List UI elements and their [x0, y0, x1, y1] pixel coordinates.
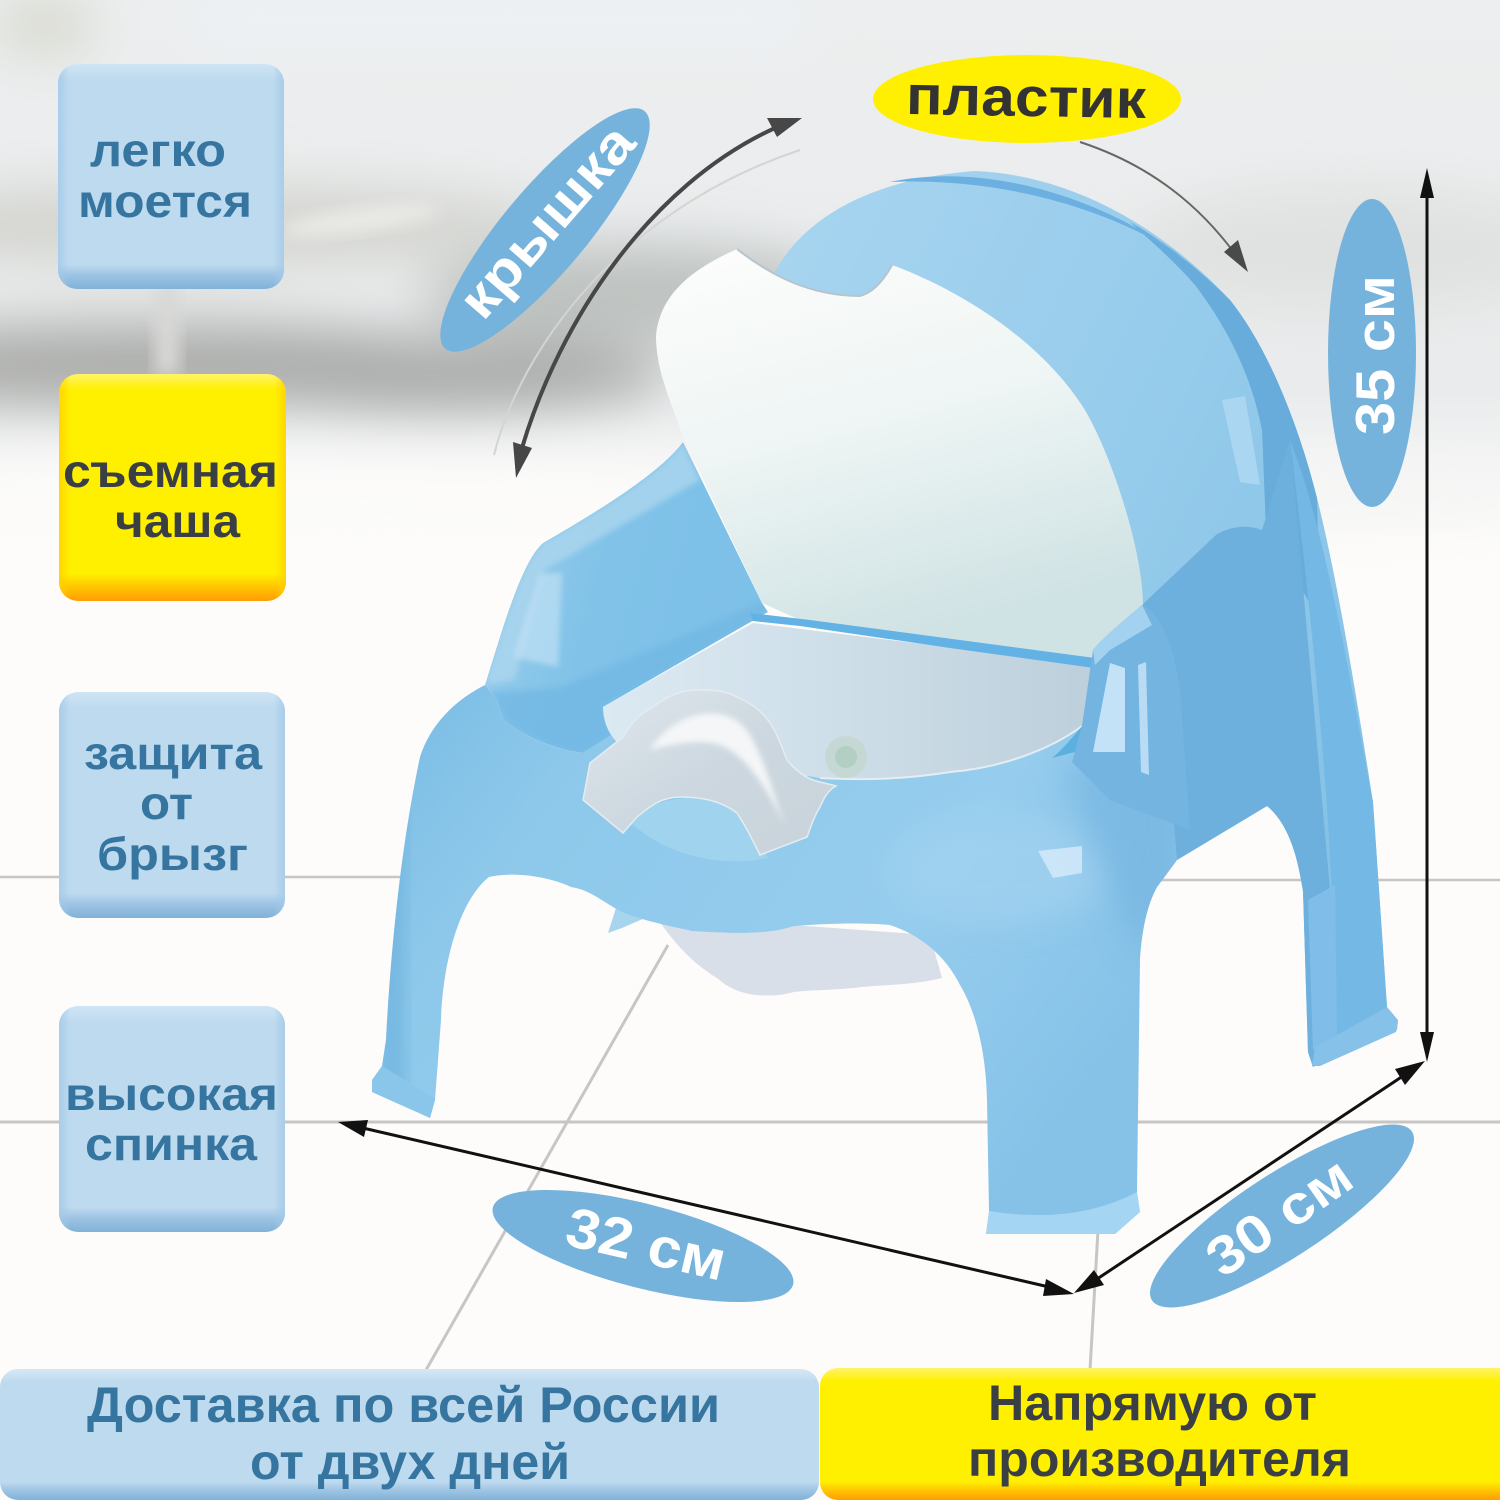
- banner: delivery: [0, 1369, 819, 1500]
- banner: delivery: Доставка по всей России: [87, 1377, 720, 1433]
- badge: [825, 736, 867, 778]
- bowl interior: [603, 623, 1095, 779]
- label: plastic: пластик: [906, 64, 1147, 130]
- guard sheen: [650, 713, 785, 825]
- dimension: height: [1328, 168, 1434, 1062]
- feature card: removable bowl: чаша: [115, 495, 240, 547]
- feature card: high back: спинка: [85, 1118, 257, 1170]
- lid: [656, 249, 1143, 665]
- dimension: width: [338, 1120, 1074, 1325]
- potty chair: [372, 171, 1398, 1234]
- feature card: easy to wash: [58, 64, 284, 289]
- splash guard: [583, 690, 836, 855]
- label: lid: крышка: [447, 112, 648, 330]
- feature card: easy to wash: моется: [78, 175, 252, 227]
- floor tile lines: [0, 877, 1500, 1370]
- background light streak: [279, 197, 441, 243]
- label: lid: [413, 84, 677, 376]
- feature card: splash guard: [59, 692, 285, 918]
- label: plastic: [873, 55, 1181, 143]
- splash guard hole: [630, 798, 768, 861]
- back top edge: [890, 176, 1180, 255]
- arrow: lid swing: [494, 118, 802, 478]
- feature card: easy to wash: легко: [90, 124, 226, 176]
- pot under seat: [655, 915, 942, 996]
- feature card: high back: [59, 1006, 285, 1232]
- feature card: high back: высокая: [65, 1068, 278, 1120]
- feature card: removable bowl: съемная: [63, 445, 278, 497]
- back dark edge: [1130, 222, 1320, 620]
- banner: manufacturer: производителя: [968, 1431, 1351, 1487]
- arrow: plastic: [1080, 142, 1248, 272]
- left armrest: [485, 442, 768, 753]
- seat sheen: [372, 760, 1190, 1234]
- backrest: [775, 171, 1398, 1067]
- side rib: [1290, 440, 1387, 1036]
- hinge tab: [608, 908, 645, 933]
- banner: manufacturer: [820, 1368, 1500, 1500]
- rim strip: [750, 613, 1095, 668]
- feature card: removable bowl: [59, 374, 286, 601]
- back highlight: [1222, 396, 1260, 485]
- dimension: depth: [1074, 1061, 1435, 1336]
- dimension: height: 35 см: [1344, 275, 1406, 435]
- dimension: depth: 30 см: [1195, 1146, 1364, 1289]
- seat and legs: [372, 685, 1177, 1234]
- feature card: splash guard: защита: [84, 727, 262, 779]
- right foot plate: [1312, 1009, 1398, 1066]
- seat highlight: [1038, 846, 1082, 878]
- right arm post: [1072, 605, 1190, 830]
- feature card: splash guard: брызг: [97, 828, 248, 880]
- right armrest body: [1072, 440, 1335, 1067]
- dimension: width: 32 см: [560, 1195, 732, 1292]
- banner: delivery: от двух дней: [250, 1434, 570, 1490]
- banner: manufacturer: Напрямую от: [988, 1375, 1317, 1431]
- feature card: splash guard: от: [140, 777, 193, 829]
